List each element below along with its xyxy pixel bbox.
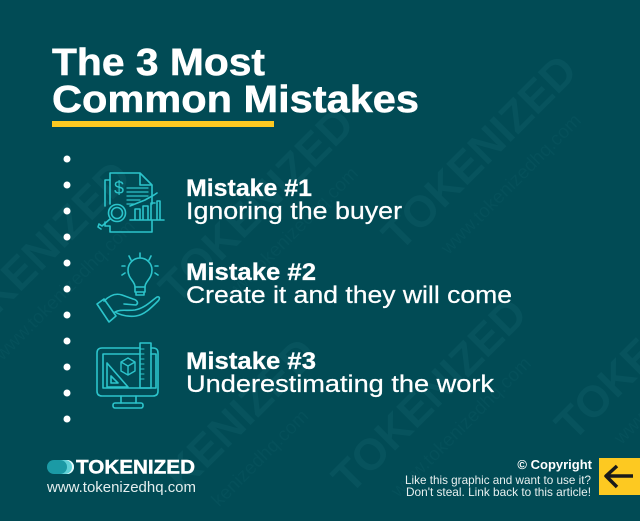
watermark pattern: kenizedhq.com bbox=[208, 406, 313, 511]
copyright notice: © Copyright bbox=[517, 457, 593, 472]
mistake 1 text: Mistake #1 bbox=[186, 175, 312, 202]
watermark pattern: TOKENIZED bbox=[323, 289, 537, 503]
title underline bbox=[52, 121, 274, 127]
title: Common Mistakes bbox=[52, 79, 419, 121]
icon: design monitor bbox=[97, 343, 158, 408]
icon: left arrow bbox=[606, 466, 633, 487]
mistake 1 text: Ignoring the buyer bbox=[186, 198, 402, 225]
watermark pattern: TOKENIZED bbox=[150, 99, 364, 313]
mistake 3 text: Underestimating the work bbox=[186, 371, 495, 398]
title bbox=[52, 42, 419, 121]
logo mark bbox=[47, 460, 74, 474]
mistake 1 text bbox=[186, 175, 402, 225]
copyright notice: Don't steal. Link back to this article! bbox=[406, 485, 591, 499]
watermark pattern: www.tokenizedhq.com bbox=[386, 353, 536, 502]
watermark pattern: TOKENIZED bbox=[373, 46, 587, 260]
bullet dots bbox=[64, 156, 70, 422]
title: The 3 Most bbox=[52, 42, 265, 84]
mistake 3 text: Mistake #3 bbox=[186, 348, 316, 375]
watermark pattern: KENIZED bbox=[155, 329, 327, 500]
mistake 2 text bbox=[186, 259, 512, 309]
mistake 2 text: Create it and they will come bbox=[186, 282, 512, 309]
watermark pattern: www.tokenizedhq.com bbox=[436, 110, 586, 259]
website url: www.tokenizedhq.com bbox=[46, 479, 196, 496]
mistake 2 text: Mistake #2 bbox=[186, 259, 316, 286]
icon: financial report bbox=[98, 173, 164, 232]
icon: light bulb and hand bbox=[97, 253, 159, 322]
arrow box bbox=[599, 458, 640, 495]
copyright notice bbox=[405, 457, 593, 499]
watermark pattern: www.tokenizedhq.com bbox=[213, 163, 363, 312]
mistake 3 text bbox=[186, 348, 495, 398]
icon: financial report: $ bbox=[114, 178, 124, 198]
logo: Tokenized: TOKENIZED bbox=[76, 458, 195, 478]
copyright notice: Like this graphic and want to use it? bbox=[405, 473, 591, 487]
